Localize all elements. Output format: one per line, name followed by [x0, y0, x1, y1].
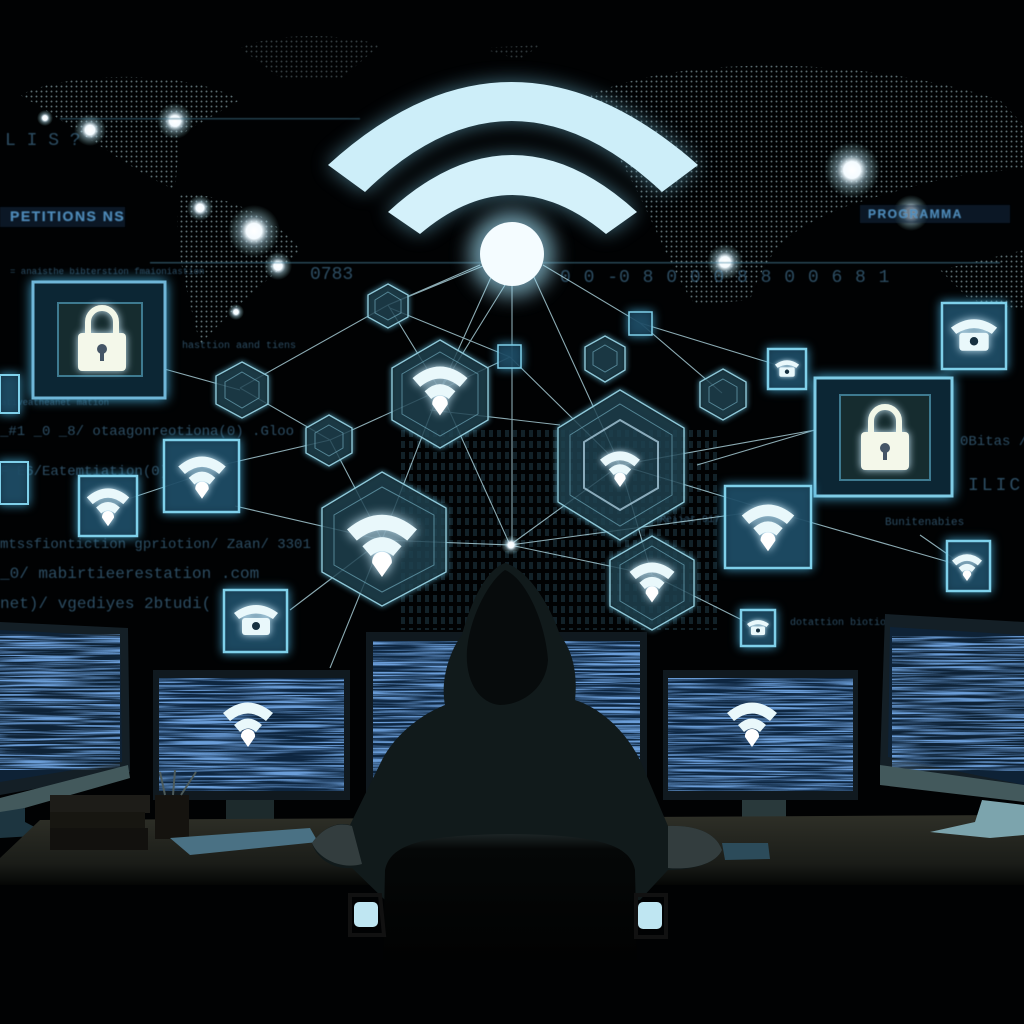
background code text: PROGRAMMA: [868, 207, 963, 221]
monitor: right: [663, 670, 858, 836]
background code text: _0/ mabirtieerestation .com: [0, 565, 259, 583]
background code text: Bunitenabies: [885, 517, 964, 529]
secure tiles: [224, 303, 1006, 652]
hexagon: Wi-Fi upper: [392, 340, 488, 448]
central glowing node: [470, 212, 554, 555]
monitor: far left: [0, 622, 130, 838]
hexagon: lower right: [610, 536, 694, 630]
monitor: far right: [880, 614, 1024, 802]
background code text: mtssfiontiction gpriotion/ Zaan/ 3301: [0, 537, 311, 553]
background code text: ativeatheanet mation: [1, 398, 109, 408]
hexagon: Wi-Fi lower left: [322, 472, 446, 606]
glowing city lights: [37, 103, 929, 320]
monitor: centre: [366, 632, 647, 804]
background code text: PETITIONS NS: [10, 208, 125, 224]
background code text: L I S ?: [5, 131, 81, 151]
small hexagon nodes: [216, 284, 746, 466]
background code text: _#1 _0 _8/ otaagonreotiona(0) .Gloo: [0, 424, 294, 440]
network connection lines: [110, 254, 966, 668]
desk: [0, 815, 1024, 885]
hexagon: centre right: [558, 390, 684, 540]
background code text: 0 0 -0 8 0 0 0 8 8 0 0 6 8 1: [560, 268, 890, 288]
lock panel: left: [33, 282, 165, 398]
background code text: = anaisthe bibterstion fmaioniastion: [10, 267, 204, 277]
background data columns: [400, 430, 720, 630]
Wi-Fi tiles: [0, 375, 990, 591]
dotted world map: [20, 36, 1024, 345]
background code text: Reiiat 917: [660, 514, 720, 526]
background code text: net)/ vgediyes 2btudi(: [0, 595, 211, 613]
background code text: [0, 118, 1024, 629]
far right monitor foot: [930, 800, 1024, 838]
desk items: books, pencil cup, keyboard, phone: [50, 770, 770, 860]
background code text: 0783: [310, 265, 353, 285]
hooded figure: [312, 563, 722, 900]
chair: [350, 834, 666, 960]
large Wi-Fi symbol: [328, 82, 698, 234]
background code text: hasttion aand tiens: [182, 340, 296, 352]
background code text: F E6/Eatemtiation(0): [0, 464, 168, 480]
background code text: ILIC: [968, 476, 1023, 496]
monitor: left: [153, 670, 350, 833]
background code text: dotattion biotion: [790, 617, 892, 629]
lock panel: right: [815, 378, 952, 496]
